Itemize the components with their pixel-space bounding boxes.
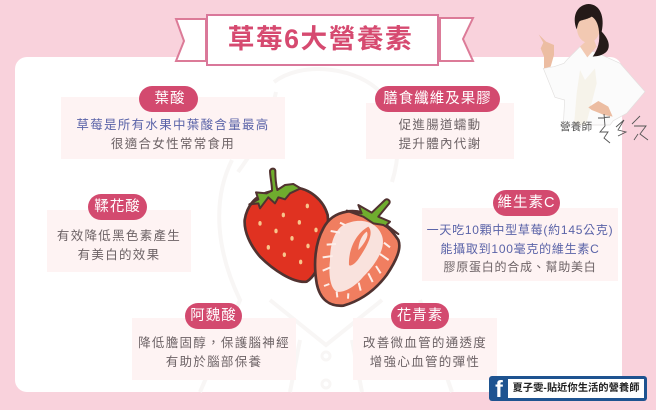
title plate	[206, 14, 439, 66]
description: 草莓是所有水果中葉酸含量最高	[76, 118, 270, 132]
whole strawberry	[245, 169, 328, 282]
heading	[493, 190, 560, 216]
coat	[543, 47, 645, 125]
heading	[139, 86, 198, 112]
description	[61, 97, 285, 159]
heading: 維生素C	[498, 195, 555, 211]
panel: ferulic acid	[132, 303, 296, 380]
heading: 鞣花酸	[94, 199, 141, 215]
description: 有助於腦部保養	[166, 354, 262, 368]
heading	[88, 194, 147, 220]
title ribbon	[174, 14, 474, 66]
description	[422, 208, 618, 281]
heading	[375, 86, 500, 112]
banner text	[508, 379, 644, 398]
description	[366, 103, 514, 159]
banner text: 夏子雯-貼近你生活的營養師	[512, 383, 640, 394]
face	[577, 14, 600, 43]
signature	[598, 114, 648, 144]
description: 能攝取到100毫克的維生素C	[440, 242, 600, 256]
blouse	[574, 68, 597, 125]
description: 增強心血管的彈性	[370, 354, 480, 368]
hair	[575, 4, 609, 57]
description: 提升體內代謝	[399, 136, 481, 150]
heading	[391, 303, 449, 329]
panel: dietary fiber and pectin	[366, 86, 514, 159]
title plate: 草莓6大營養素	[228, 24, 413, 54]
description	[47, 210, 191, 272]
cut strawberry	[315, 199, 399, 306]
ribbon tails	[174, 17, 474, 62]
hand on hip	[588, 101, 613, 117]
heading	[185, 303, 242, 329]
panel: vitamin C	[422, 190, 618, 281]
description: 膠原蛋白的合成、幫助美白	[443, 260, 596, 274]
description: 很適合女性常常食用	[111, 136, 235, 150]
description	[132, 318, 296, 380]
panel: anthocyanin	[353, 303, 497, 380]
description: 一天吃10顆中型草莓(約145公克)	[427, 223, 613, 237]
heading: 膳食纖維及果膠	[383, 91, 492, 107]
description: 有美白的效果	[78, 248, 160, 262]
nutritionist photo	[539, 4, 646, 126]
panel: ellagic acid	[47, 194, 191, 272]
white content panel	[15, 57, 622, 392]
heading: 花青素	[397, 308, 443, 324]
description	[353, 318, 497, 380]
facebook banner	[489, 376, 647, 401]
description: 降低膽固醇，保護腦神經	[138, 336, 290, 350]
panel: folic acid	[61, 86, 285, 159]
description: 有效降低黑色素產生	[57, 229, 181, 243]
icon: facebook: f	[495, 376, 503, 402]
raised hand	[539, 34, 554, 68]
description: 改善微血管的通透度	[363, 336, 487, 350]
nutritionist caption: 營養師	[560, 121, 592, 133]
illustration: strawberries	[243, 168, 401, 308]
heading: 葉酸	[154, 91, 186, 107]
description: 促進腸道蠕動	[399, 118, 481, 132]
heading: 阿魏酸	[190, 308, 237, 324]
